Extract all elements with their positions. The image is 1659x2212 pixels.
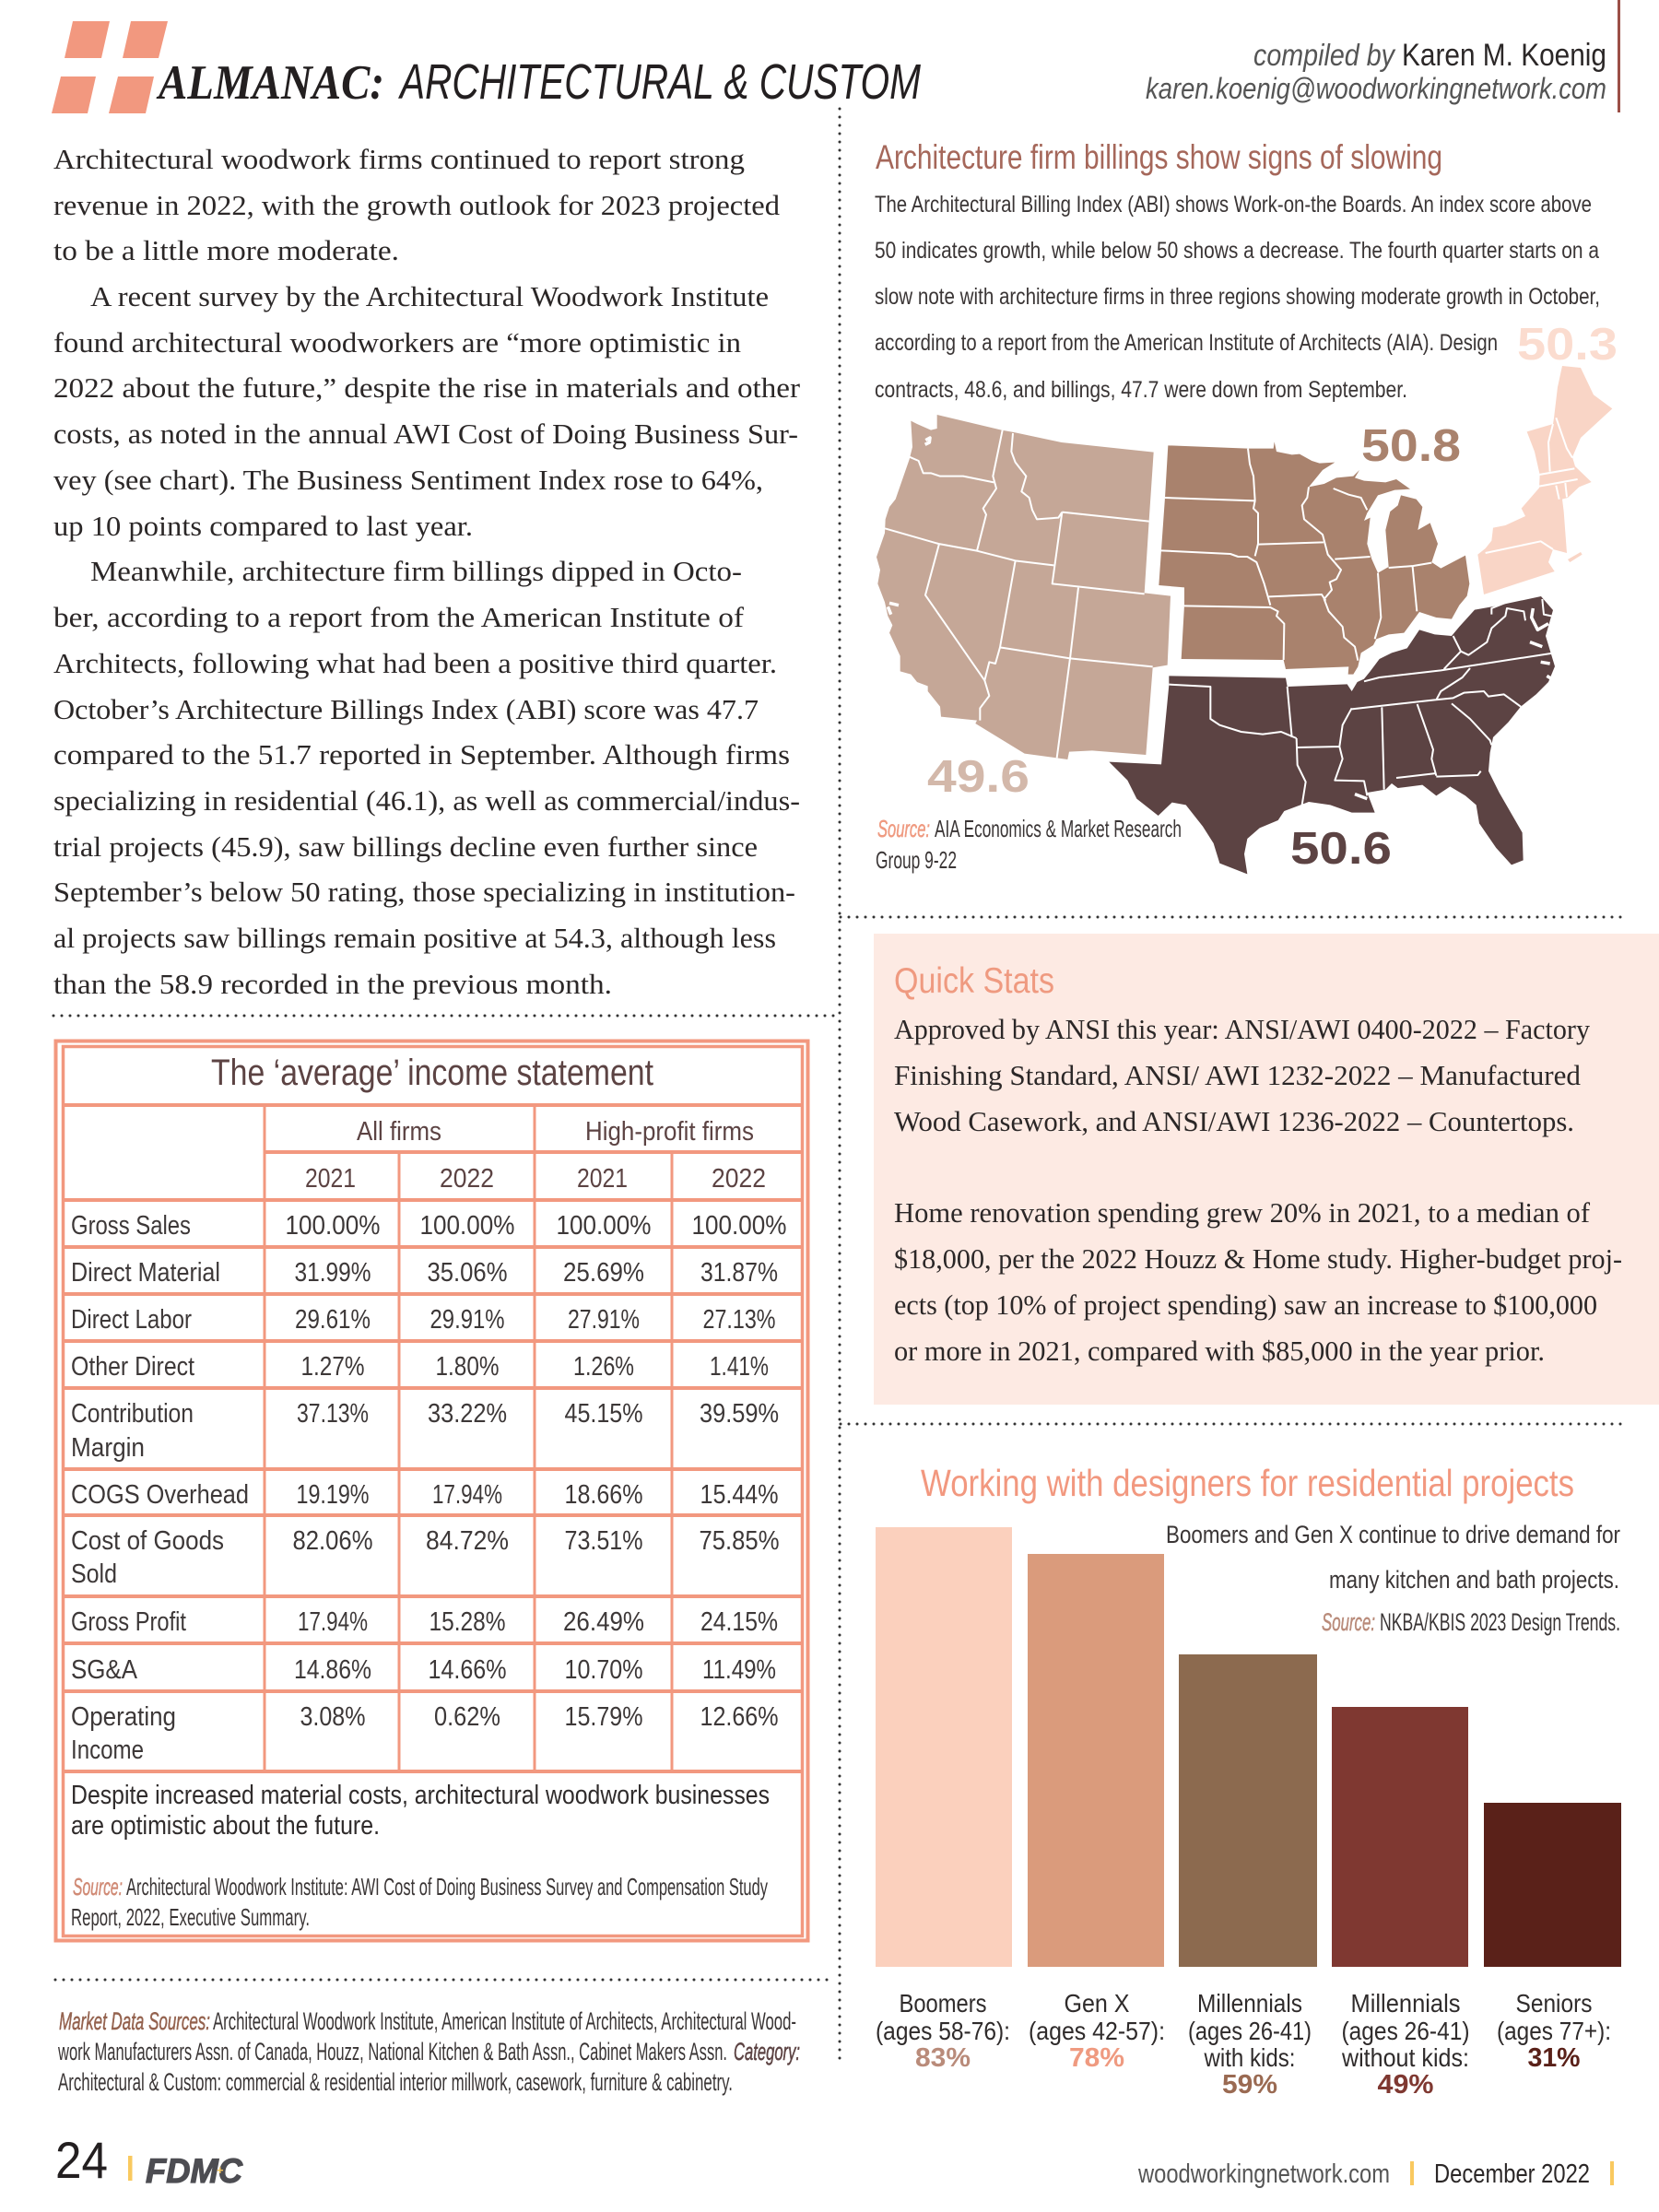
bar labels: Seniors — [1515, 1989, 1593, 2018]
map source: Group 9-22 — [876, 846, 957, 874]
table row labels: Gross Sales — [71, 1211, 191, 1241]
table row labels: Direct Labor — [71, 1305, 192, 1335]
table values: 15.28% — [429, 1607, 505, 1637]
bar labels: (ages 77+): — [1497, 2017, 1611, 2045]
table values: 25.69% — [563, 1258, 644, 1288]
panel: quick stats — [874, 934, 1659, 1405]
header — [52, 0, 1620, 113]
region: South — [1109, 596, 1555, 874]
designers intro text — [1166, 1521, 1620, 1636]
title: ALMANAC: — [156, 56, 384, 110]
article body text: trial projects (45.9), saw billings decline even further since — [53, 830, 758, 863]
table values: 24.15% — [700, 1607, 778, 1637]
billings text block: contracts, 48.6, and billings, 47.7 were down from September. — [875, 377, 1407, 403]
table column headers: 2021 — [577, 1164, 628, 1194]
bar labels: with kids: — [1204, 2043, 1296, 2072]
table values: 15.79% — [564, 1702, 643, 1732]
quick stats text: Wood Casework, and ANSI/AWI 1236-2022 – Countertops. — [894, 1105, 1574, 1137]
article body text: compared to the 51.7 reported in September. Although firms — [53, 738, 790, 771]
table row labels: Operating — [71, 1702, 176, 1732]
title: ARCHITECTURAL & CUSTOM — [398, 54, 921, 110]
table values: 100.00% — [691, 1211, 787, 1241]
table column headers: High-profit firms — [585, 1117, 754, 1147]
table values: 100.00% — [420, 1211, 514, 1241]
table column headers: 2022 — [440, 1164, 494, 1194]
table values: 15.44% — [700, 1480, 778, 1510]
billings text block — [875, 192, 1600, 403]
table values: 29.91% — [429, 1305, 505, 1335]
table values: 29.61% — [295, 1305, 371, 1335]
heading: quick stats: Quick Stats — [894, 961, 1054, 1001]
quick stats text: $18,000, per the 2022 Houzz & Home study. Higher-budget proj- — [894, 1242, 1622, 1275]
article body text: A recent survey by the Architectural Woodwork Institute — [90, 280, 769, 312]
bar labels: (ages 26-41) — [1188, 2017, 1312, 2045]
table row labels: Direct Material — [71, 1258, 220, 1288]
table column headers — [305, 1117, 766, 1194]
icon: quotation block mark — [52, 21, 168, 113]
article body text: al projects saw billings remain positive at 54.3, although less — [53, 922, 776, 954]
quick stats text: Approved by ANSI this year: ANSI/AWI 0400-2022 – Factory — [894, 1013, 1590, 1045]
article body text: costs, as noted in the annual AWI Cost of Doing Business Sur- — [53, 418, 798, 450]
market data sources: Architectural & Custom: commercial & residential interior millwork, casework, furniture & cabinetry. — [58, 2068, 733, 2096]
table values: 31.87% — [700, 1258, 778, 1288]
table values: 82.06% — [293, 1526, 372, 1556]
table values: 45.15% — [564, 1399, 643, 1429]
table row labels: SG&A — [71, 1655, 138, 1685]
table values: 27.13% — [702, 1305, 776, 1335]
table row labels: COGS Overhead — [71, 1480, 249, 1510]
bar labels: without kids: — [1341, 2043, 1469, 2072]
map values: 50.6 — [1290, 824, 1392, 874]
bar labels: (ages 58-76): — [876, 2017, 1010, 2045]
market data sources: work Manufacturers Assn. of Canada, Houzz, National Kitchen & Bath Assn., Cabinet Makers Assn. — [57, 2038, 727, 2065]
region: West — [877, 415, 1171, 759]
table values: 26.49% — [563, 1607, 644, 1637]
market data sources — [57, 2007, 800, 2096]
article body text: October’s Architecture Billings Index (ABI) score was 47.7 — [53, 693, 759, 725]
footer site and date: woodworkingnetwork.com — [1137, 2159, 1390, 2189]
bar labels: Gen X — [1064, 1989, 1130, 2018]
table values: 37.13% — [297, 1399, 369, 1429]
article body text — [53, 143, 801, 1000]
table source: Architectural Woodwork Institute: AWI Cost of Doing Business Survey and Compensation Study — [126, 1873, 768, 1900]
bar labels: 49% — [1377, 2070, 1434, 2100]
table values: 27.91% — [568, 1305, 640, 1335]
table values: 39.59% — [700, 1399, 779, 1429]
table values: 1.80% — [435, 1352, 500, 1382]
table values: 75.85% — [699, 1526, 780, 1556]
table column headers: All firms — [357, 1117, 441, 1147]
table row labels — [71, 1211, 249, 1765]
article body text: 2022 about the future,” despite the rise in materials and other — [53, 371, 801, 404]
table source: Report, 2022, Executive Summary. — [71, 1903, 310, 1931]
byline: compiled by — [1253, 38, 1396, 72]
bar labels: Boomers — [900, 1989, 986, 2018]
table values: 100.00% — [286, 1211, 380, 1241]
table values: 31.99% — [295, 1258, 371, 1288]
page number: 24 — [55, 2131, 108, 2189]
bar labels: (ages 26-41) — [1342, 2017, 1469, 2045]
table values: 17.94% — [298, 1607, 368, 1637]
article body text: up 10 points compared to last year. — [53, 510, 473, 542]
table row labels: Gross Profit — [71, 1607, 186, 1637]
article body text: than the 58.9 recorded in the previous month. — [53, 968, 612, 1000]
article body text: specializing in residential (46.1), as well as commercial/indus- — [53, 784, 800, 817]
table values: 84.72% — [426, 1526, 509, 1556]
table values: 17.94% — [432, 1480, 502, 1510]
title — [156, 54, 921, 110]
map: US regions — [877, 366, 1612, 874]
table source — [71, 1873, 768, 1931]
footer — [55, 2131, 1614, 2190]
table row labels: Cost of Goods — [71, 1526, 224, 1556]
table values: 73.51% — [564, 1526, 643, 1556]
bar labels: Millennials — [1197, 1989, 1302, 2018]
quick stats text: Home renovation spending grew 20% in 2021, to a median of — [894, 1196, 1591, 1229]
article body text: Architects, following what had been a positive third quarter. — [53, 647, 777, 679]
market data sources: Architectural Woodwork Institute, American Institute of Architects, Architectural Wood- — [213, 2007, 796, 2035]
map values: 50.3 — [1517, 320, 1618, 370]
quick stats text: ects (top 10% of project spending) saw an increase to $100,000 — [894, 1288, 1597, 1321]
table values: 14.86% — [294, 1655, 371, 1685]
table row labels: Other Direct — [71, 1352, 194, 1382]
table values: 12.66% — [700, 1702, 778, 1732]
quick stats text — [894, 1013, 1622, 1367]
article body text: Meanwhile, architecture firm billings dipped in Octo- — [90, 555, 742, 587]
table values: 1.26% — [573, 1352, 634, 1382]
byline: Karen M. Koenig — [1402, 38, 1606, 73]
table values: 3.08% — [300, 1702, 365, 1732]
article body text: revenue in 2022, with the growth outlook for 2023 projected — [53, 189, 781, 221]
table column headers: 2022 — [712, 1164, 766, 1194]
table values: 0.62% — [434, 1702, 500, 1732]
article body text: September’s below 50 rating, those specializing in institution- — [53, 876, 795, 908]
region: Midwest — [1159, 441, 1469, 675]
table values: 33.22% — [428, 1399, 507, 1429]
quick stats text: or more in 2021, compared with $85,000 in the year prior. — [894, 1335, 1545, 1367]
table values — [286, 1211, 787, 1732]
table values: 19.19% — [297, 1480, 369, 1510]
map source: Source: — [877, 815, 930, 842]
table row labels: Income — [71, 1735, 144, 1765]
bar labels — [876, 1989, 1611, 2100]
bar labels: 83% — [915, 2043, 971, 2073]
panel: working with designers — [876, 1462, 1621, 2100]
byline — [1146, 38, 1606, 105]
logo: FDMC: + — [217, 2163, 224, 2177]
table note — [71, 1781, 770, 1841]
table values: 18.66% — [564, 1480, 643, 1510]
bar labels: Millennials — [1351, 1989, 1460, 2018]
market data sources: Market Data Sources: — [59, 2007, 210, 2035]
table row labels: Contribution — [71, 1399, 194, 1429]
article body text: found architectural woodworkers are “more optimistic in — [53, 326, 742, 359]
article body text: Architectural woodwork firms continued to report strong — [53, 143, 745, 175]
footer site and date: December 2022 — [1434, 2159, 1590, 2189]
market data sources: Category: — [734, 2038, 800, 2065]
table values: 14.66% — [428, 1655, 507, 1685]
bar labels: 59% — [1222, 2070, 1277, 2100]
table column headers: 2021 — [305, 1164, 356, 1194]
table values: 1.27% — [300, 1352, 365, 1382]
map values: 49.6 — [927, 752, 1030, 802]
designers intro text: Source: — [1322, 1608, 1375, 1636]
bar labels: 78% — [1069, 2043, 1124, 2073]
table note: Despite increased material costs, architectural woodwork businesses — [71, 1781, 770, 1810]
billings text block: according to a report from the American Institute of Architects (AIA). Design — [875, 330, 1498, 356]
table title: The ‘average’ income statement — [211, 1053, 653, 1093]
article body text: to be a little more moderate. — [53, 234, 399, 266]
region: Northeast — [1477, 366, 1612, 594]
table values: 35.06% — [428, 1258, 507, 1288]
article body text: ber, according to a report from the American Institute of — [53, 601, 745, 633]
panel: income statement table — [55, 1041, 807, 1941]
heading: billings: Architecture firm billings show signs of slowing — [876, 138, 1442, 176]
logo: FDMC: FDMC — [146, 2152, 243, 2190]
bar chart — [876, 1527, 1621, 1967]
bar labels: (ages 42-57): — [1029, 2017, 1165, 2045]
table source: Source: — [73, 1873, 123, 1900]
table row labels: Margin — [71, 1433, 145, 1463]
map values: 50.8 — [1361, 421, 1461, 471]
table values: 11.49% — [702, 1655, 776, 1685]
table note: are optimistic about the future. — [71, 1811, 380, 1841]
article body text: vey (see chart). The Business Sentiment Index rose to 64%, — [53, 464, 763, 496]
footer site and date — [1137, 2159, 1614, 2189]
table values: 10.70% — [564, 1655, 643, 1685]
table row labels: Sold — [71, 1559, 117, 1589]
map source: AIA Economics & Market Research — [935, 815, 1182, 842]
map source — [876, 815, 1182, 874]
panel: architecture billings — [875, 138, 1618, 874]
bar labels: 31% — [1528, 2043, 1581, 2073]
table values: 1.41% — [710, 1352, 769, 1382]
table values: 100.00% — [557, 1211, 651, 1241]
quick stats text: Finishing Standard, ANSI/ AWI 1232-2022 – Manufactured — [894, 1059, 1581, 1091]
map values — [927, 320, 1618, 874]
